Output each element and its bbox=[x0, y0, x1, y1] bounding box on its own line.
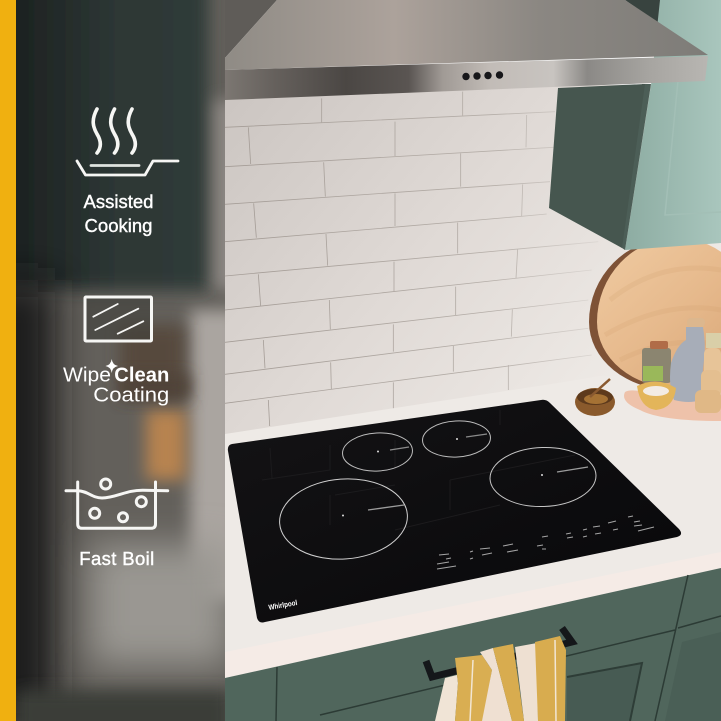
hood knobs bbox=[462, 71, 503, 80]
feature: wipe clean coating bbox=[63, 297, 175, 407]
label: wipe clean coating: Clean bbox=[114, 365, 169, 387]
lower cabinets bbox=[225, 568, 721, 721]
icon: boiling pot bbox=[66, 479, 168, 528]
grey grinder bbox=[670, 318, 705, 402]
cutting board bbox=[589, 238, 721, 390]
range hood bbox=[225, 0, 708, 100]
whirlpool logo: Whirlpool bbox=[268, 598, 298, 612]
icon: glass panel bbox=[85, 297, 152, 341]
upper cabinet bbox=[549, 0, 721, 250]
countertop front edge bbox=[225, 552, 721, 678]
control labels bbox=[437, 516, 654, 569]
label: wipe clean coating: Coating bbox=[93, 385, 169, 407]
spice bowl and spoon bbox=[575, 379, 615, 416]
cooking zone: right bbox=[489, 446, 597, 508]
induction cooktop bbox=[228, 400, 681, 622]
wood grinder stack bbox=[695, 333, 721, 413]
pink tray bbox=[624, 390, 721, 421]
striped towel bbox=[435, 636, 566, 721]
icon: steaming pan bbox=[77, 109, 178, 175]
yellow side stripe bbox=[0, 0, 16, 721]
cooking zone: rear centre bbox=[422, 419, 491, 459]
blurred left panel bbox=[16, 0, 225, 721]
feature: assisted cooking bbox=[77, 109, 178, 236]
cabinet handle bbox=[426, 628, 572, 677]
tiled backsplash wall bbox=[225, 85, 721, 445]
yellow bowl bbox=[637, 381, 676, 410]
white countertop bbox=[225, 376, 721, 678]
label: fast boil: Fast Boil bbox=[79, 548, 154, 569]
icon: sparkle bbox=[106, 359, 118, 373]
label: assisted cooking: Cooking bbox=[85, 215, 152, 236]
label: wipe clean coating: Wipe bbox=[63, 365, 111, 387]
label: assisted cooking: Assisted bbox=[84, 191, 153, 212]
cooking zone: rear left bbox=[342, 431, 413, 473]
feature: fast boil bbox=[66, 479, 168, 569]
cooking zone: large front left bbox=[277, 475, 410, 563]
spice jar bbox=[642, 341, 671, 383]
door recess bbox=[567, 663, 642, 721]
